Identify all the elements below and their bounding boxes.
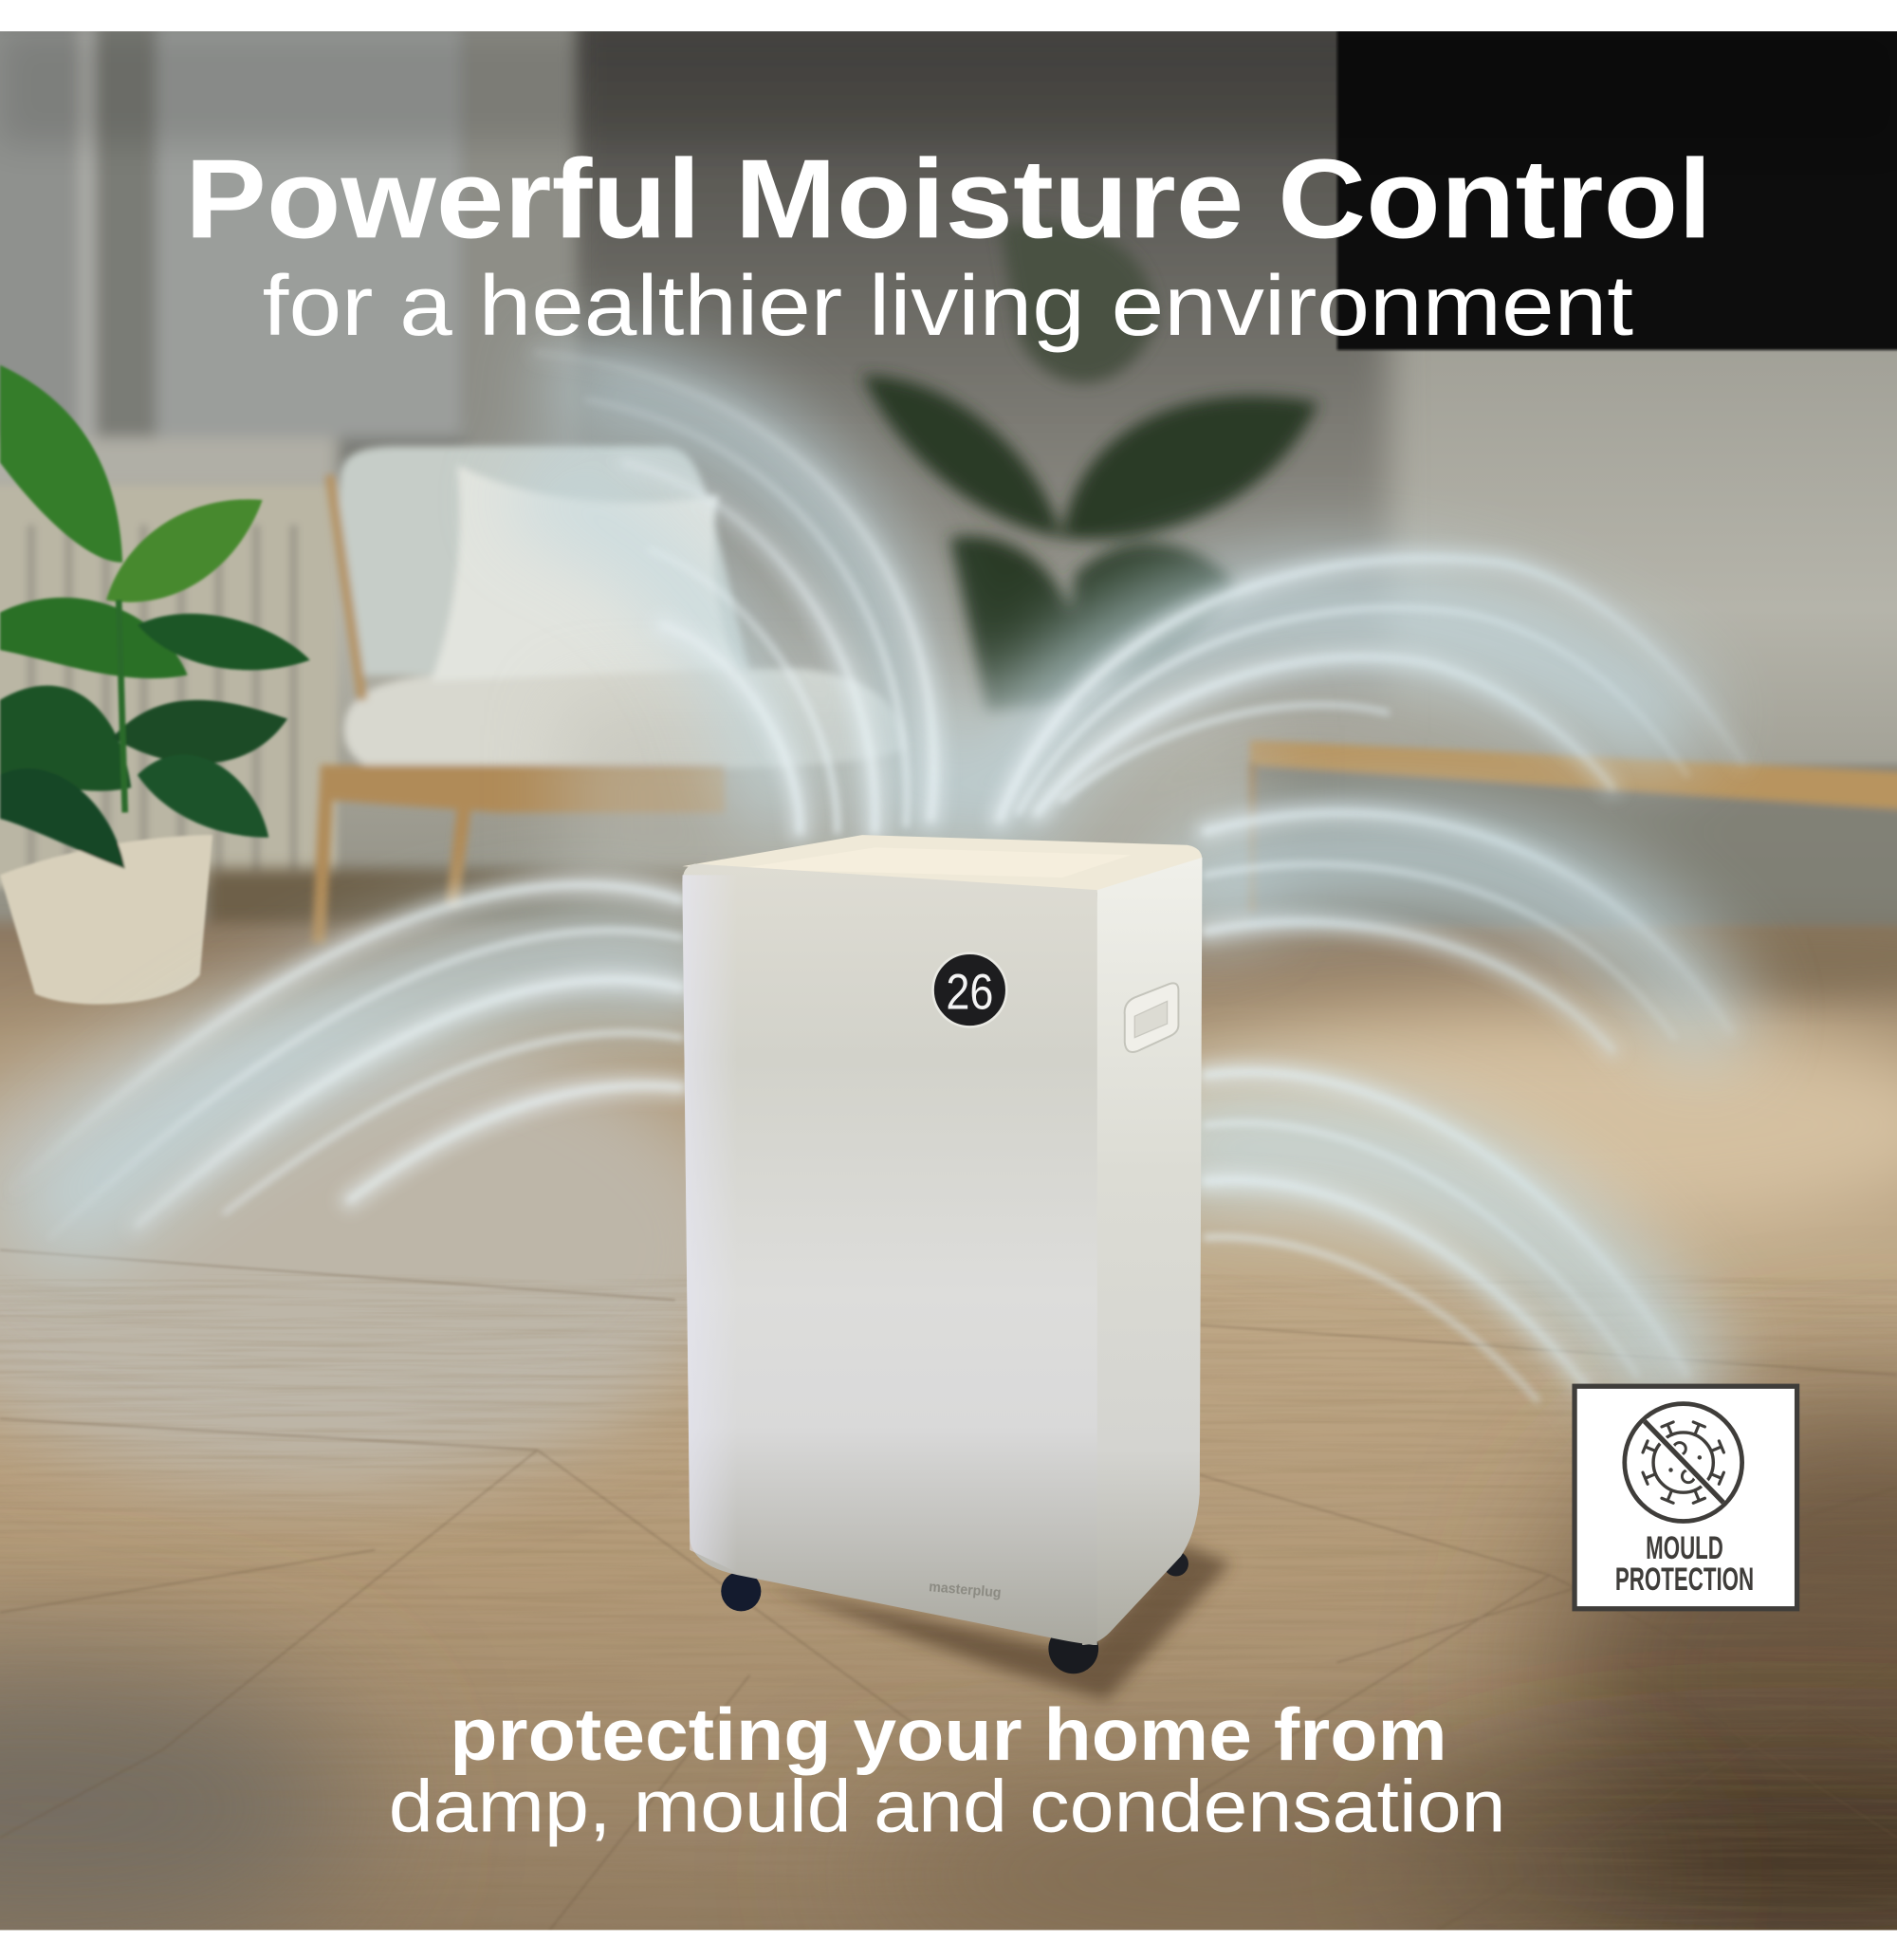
badge: mould protection: PROTECTION bbox=[1615, 1562, 1754, 1598]
wheels bbox=[721, 1551, 1188, 1673]
display: 26 bbox=[946, 964, 993, 1020]
right side face bbox=[1082, 858, 1202, 1645]
badge: mould protection bbox=[1575, 1386, 1797, 1609]
plant pot bbox=[0, 835, 212, 1005]
badge text: MOULD bbox=[1646, 1530, 1723, 1566]
airflow: soft bands bbox=[0, 353, 1743, 1388]
central plant bbox=[862, 222, 1318, 712]
haze overlay bbox=[562, 700, 1262, 925]
chair back bbox=[340, 446, 750, 675]
icon: no mould bbox=[1625, 1404, 1742, 1522]
pillow bbox=[432, 465, 737, 681]
wooden bench bbox=[1250, 740, 1897, 925]
subtitle: for a healthier living environment bbox=[263, 258, 1633, 353]
airflow: soft glow bbox=[75, 387, 1700, 1362]
chair frame bbox=[319, 765, 469, 944]
left plant bbox=[0, 365, 310, 1005]
radiator bbox=[0, 485, 338, 887]
handle bbox=[1125, 983, 1178, 1052]
TV bbox=[1337, 0, 1897, 350]
airflow: streak lines bbox=[0, 353, 1743, 1400]
left edge highlight bbox=[682, 875, 737, 1573]
back wall bbox=[0, 0, 1897, 950]
floor shadow bbox=[763, 1544, 1231, 1700]
caption bold: protecting your home from bbox=[450, 1694, 1447, 1776]
display bbox=[933, 953, 1006, 1026]
wood grain bbox=[0, 1275, 1897, 1930]
chair seat bbox=[344, 669, 906, 768]
top grille bbox=[737, 847, 1131, 878]
floor bbox=[0, 922, 1897, 1955]
top face bbox=[682, 835, 1202, 893]
floor lighting bbox=[0, 918, 1897, 1955]
title: Powerful Moisture Control bbox=[185, 137, 1712, 262]
product: dehumidifier bbox=[682, 835, 1231, 1700]
window bbox=[0, 0, 575, 488]
leaves bbox=[0, 365, 122, 563]
caption regular: damp, mould and condensation bbox=[389, 1766, 1506, 1847]
armchair bbox=[319, 446, 906, 944]
brand label: masterplug bbox=[929, 1580, 1002, 1601]
central dark wall bbox=[565, 0, 1390, 737]
front face bbox=[682, 863, 1097, 1645]
floor boards bbox=[0, 1250, 1897, 1930]
